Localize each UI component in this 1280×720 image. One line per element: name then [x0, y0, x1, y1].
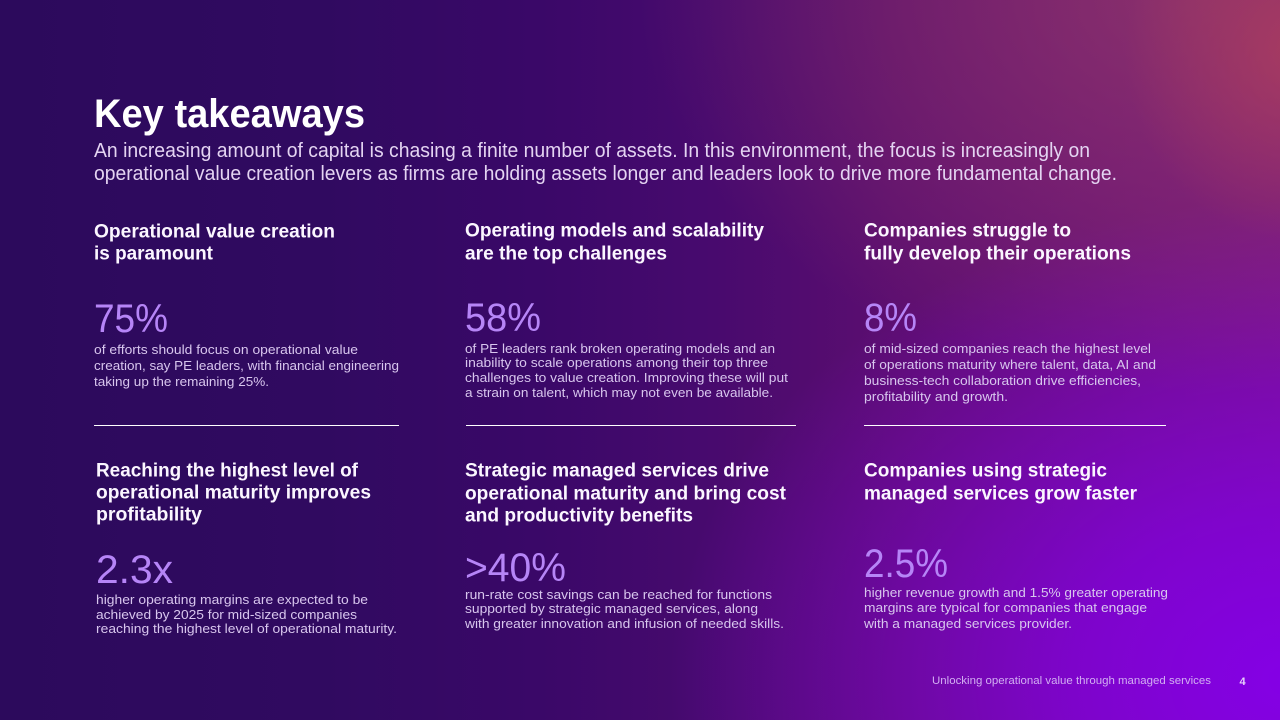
description: a strain on talent, which may not even be available. — [465, 385, 773, 400]
heading: fully develop their operations — [864, 244, 1131, 264]
panel: operational maturity profitability — [96, 460, 397, 636]
description: reaching the highest level of operational maturity. — [96, 621, 397, 636]
panel: companies struggle — [864, 220, 1156, 404]
description: of operations maturity where talent, data, AI and — [864, 357, 1156, 372]
description: run-rate cost savings can be reached for functions — [465, 587, 773, 602]
description: margins are typical for companies that engage — [864, 600, 1147, 615]
description — [94, 342, 399, 389]
heading: Strategic managed services drive — [465, 460, 769, 482]
heading — [465, 220, 764, 264]
description: of efforts should focus on operational value — [94, 342, 358, 357]
description: profitability and growth. — [864, 389, 1008, 404]
statistic: 2.5%: 2.5% — [864, 542, 948, 586]
heading: is paramount — [94, 244, 214, 264]
description: with a managed services provider. — [863, 616, 1072, 631]
heading — [94, 222, 335, 264]
heading — [465, 460, 787, 526]
description: inability to scale operations among their top three — [465, 355, 768, 370]
statistic: >40%: >40% — [465, 546, 566, 590]
heading: profitability — [96, 504, 202, 526]
subtitle — [94, 140, 1117, 185]
description: challenges to value creation. Improving these will put — [465, 370, 788, 385]
description: business-tech collaboration drive efficiencies, — [864, 373, 1141, 388]
panel: strategic managed services — [464, 460, 787, 631]
heading: Reaching the highest level of — [96, 460, 359, 482]
heading: Operational value creation — [94, 222, 335, 242]
title: Key takeaways — [94, 92, 365, 136]
footer: Unlocking operational value through managed services — [932, 675, 1212, 687]
description — [96, 592, 397, 636]
heading — [864, 220, 1131, 264]
subtitle: operational value creation levers as firms are holding assets longer and leaders look to drive more fundamental change. — [94, 163, 1117, 185]
panel: operating models — [465, 220, 788, 400]
heading — [864, 460, 1138, 504]
description — [464, 587, 784, 631]
panel: operational value creation — [94, 222, 399, 389]
subtitle: An increasing amount of capital is chasing a finite number of assets. In this environment, the focus is increasingly on — [94, 140, 1090, 162]
heading: Companies using strategic — [864, 460, 1107, 482]
description — [863, 585, 1168, 631]
heading: operational maturity improves — [96, 482, 371, 504]
description: achieved by 2025 for mid-sized companies — [96, 607, 358, 622]
description: supported by strategic managed services, along — [465, 601, 758, 616]
description — [864, 341, 1156, 404]
panel: companies grow faster — [863, 460, 1168, 631]
description: higher revenue growth and 1.5% greater operating — [864, 585, 1168, 600]
heading: operational maturity and bring cost — [465, 484, 787, 504]
heading: Companies struggle to — [864, 220, 1071, 242]
description — [465, 341, 788, 400]
heading — [96, 460, 371, 526]
heading: Operating models and scalability — [465, 220, 764, 242]
description: higher operating margins are expected to be — [96, 592, 368, 607]
statistic: 58%: 58% — [465, 296, 541, 340]
heading: managed services grow faster — [864, 484, 1138, 504]
statistic: 75%: 75% — [94, 297, 168, 341]
heading: are the top challenges — [465, 244, 667, 264]
statistic: 8%: 8% — [864, 296, 917, 340]
heading: and productivity benefits — [465, 506, 693, 526]
description: of mid-sized companies reach the highest level — [864, 341, 1151, 356]
description: taking up the remaining 25%. — [94, 374, 269, 389]
footer: 4 — [1240, 676, 1246, 688]
statistic: 2.3x: 2.3x — [96, 548, 173, 592]
description: of PE leaders rank broken operating models and an — [465, 341, 775, 356]
description: creation, say PE leaders, with financial engineering — [94, 358, 399, 373]
description: with greater innovation and infusion of needed skills. — [464, 616, 784, 631]
